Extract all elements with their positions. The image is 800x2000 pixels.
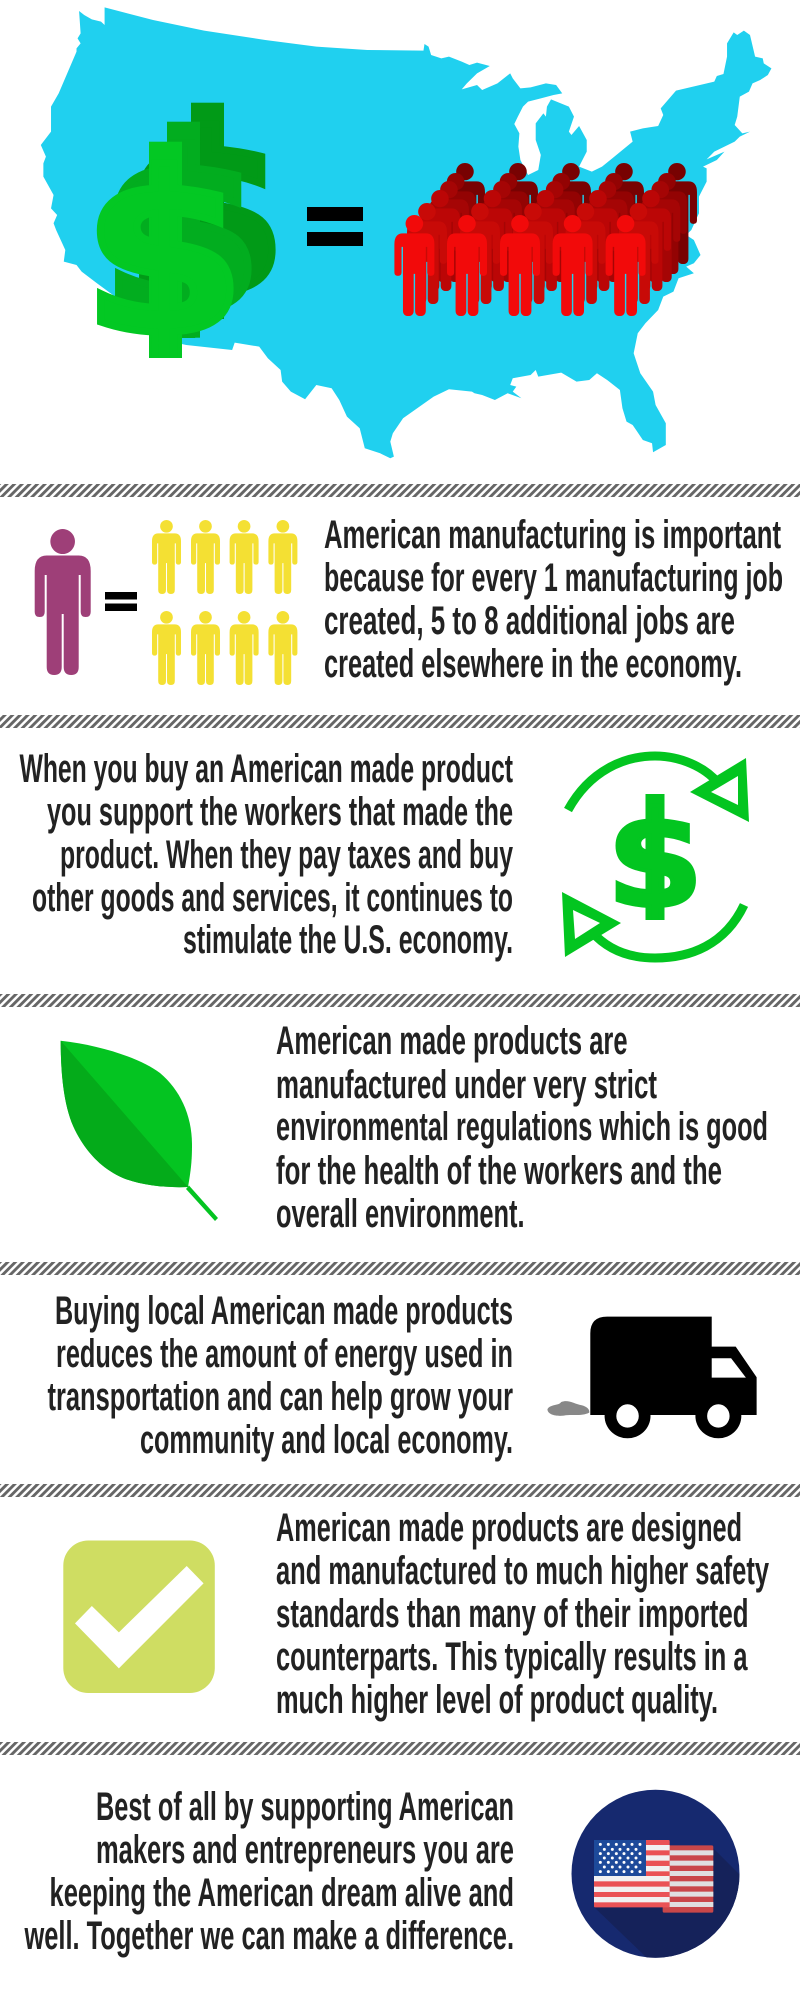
exhaust smoke bbox=[547, 1401, 589, 1416]
text: support the workers bbox=[20, 747, 513, 962]
icon: check mark box bbox=[63, 1540, 215, 1693]
text: American dream: well. Together we can make a difference. bbox=[24, 1914, 514, 1958]
text: buying local: Buying local American made products bbox=[55, 1289, 513, 1333]
icon: stacked dollar signs: $ bbox=[100, 106, 264, 364]
icon: US flag badge bbox=[572, 1790, 740, 1958]
front flag panel bbox=[594, 1840, 670, 1907]
stars bbox=[599, 1843, 641, 1873]
text: support the workers: other goods and services, it continues to bbox=[32, 876, 513, 920]
text: American dream: keeping the American dream alive and bbox=[50, 1871, 514, 1915]
icon: circulating dollar bbox=[562, 756, 749, 958]
equals sign bbox=[307, 207, 363, 246]
text: buying local bbox=[48, 1289, 513, 1462]
text: environmental regulations: overall environment. bbox=[276, 1192, 524, 1236]
text: buying local: community and local economy. bbox=[140, 1418, 513, 1462]
text: manufacturing jobs bbox=[324, 513, 783, 686]
icon: delivery truck bbox=[547, 1317, 757, 1438]
icon: purple worker bbox=[35, 529, 91, 675]
panel: American dream bbox=[24, 1790, 740, 1958]
panel: jobs multiplier bbox=[35, 513, 783, 686]
text: American dream bbox=[24, 1785, 514, 1958]
text: American dream: makers and entrepreneurs you are bbox=[96, 1828, 514, 1872]
icon: eight yellow workers bbox=[152, 520, 297, 685]
text: support the workers: When you buy an American made product bbox=[20, 747, 513, 791]
panel: money cycle bbox=[20, 747, 749, 962]
panel: environment bbox=[61, 1019, 768, 1236]
text: buying local: transportation and can help grow your bbox=[48, 1375, 513, 1419]
text: support the workers: product. When they pay taxes and buy bbox=[60, 833, 513, 877]
text: support the workers: stimulate the U.S. economy. bbox=[183, 918, 513, 962]
map of the United States bbox=[41, 7, 771, 458]
panel: safety bbox=[63, 1506, 769, 1722]
back flag panel bbox=[663, 1845, 713, 1913]
equals sign bbox=[105, 592, 137, 611]
icon: stacked dollar signs: $ bbox=[82, 126, 246, 384]
icon: stacked dollar signs: $ bbox=[124, 87, 288, 345]
panel: hero map bbox=[41, 7, 771, 458]
icon: circulating dollar: $ bbox=[607, 783, 703, 937]
panel: local transport bbox=[48, 1289, 757, 1462]
text: buying local: reduces the amount of energy used in bbox=[56, 1332, 513, 1376]
icon: crowd of red workers bbox=[394, 163, 697, 316]
text: American dream: Best of all by supporting American bbox=[96, 1785, 514, 1829]
text: safety standards bbox=[276, 1506, 769, 1722]
text: environmental regulations bbox=[276, 1019, 768, 1236]
text: support the workers: you support the workers that made the bbox=[47, 790, 513, 834]
icon: green leaf bbox=[61, 1041, 218, 1221]
